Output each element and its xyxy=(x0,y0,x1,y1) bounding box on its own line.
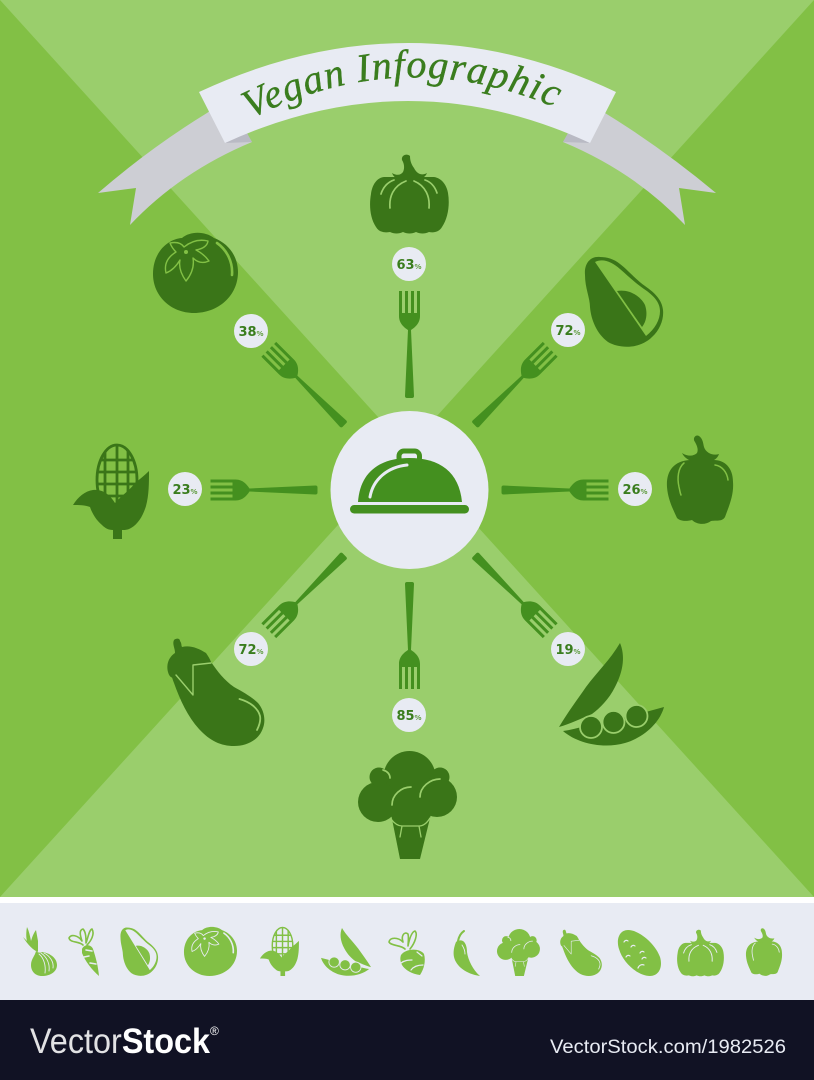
fork: bottom xyxy=(399,582,420,689)
icon: bell pepper xyxy=(667,435,733,524)
icon: pumpkin xyxy=(370,155,449,234)
cloche tray xyxy=(350,505,469,514)
small icon: carrot xyxy=(69,929,99,976)
footer bar xyxy=(0,1000,814,1080)
badge: 38% xyxy=(234,314,268,348)
badge: 23%: 23% xyxy=(172,483,198,498)
cloche handle xyxy=(399,451,420,463)
badge: 72% top right xyxy=(551,313,585,347)
badge: 26% xyxy=(618,472,652,506)
ribbon banner with title xyxy=(98,43,716,225)
small icon: chili xyxy=(454,931,480,976)
background: top light triangle xyxy=(0,0,814,449)
footer image id: VectorStock.com/1982526 xyxy=(550,1037,786,1058)
badge: 38%: 38% xyxy=(238,325,264,340)
badge: 19%: 19% xyxy=(555,643,581,658)
icon: peas xyxy=(559,643,664,746)
white divider strip xyxy=(0,897,814,903)
ribbon left fold xyxy=(225,133,252,143)
small icon: peas xyxy=(321,928,371,976)
fork: left xyxy=(210,480,318,500)
icon: eggplant xyxy=(167,639,264,746)
badge: 63% xyxy=(392,247,426,281)
fork: top left xyxy=(261,342,352,432)
background: bottom light triangle xyxy=(0,449,814,897)
badge: 72% bottom left xyxy=(234,632,268,666)
icon: avocado xyxy=(585,257,663,347)
small icon: pepper xyxy=(746,928,782,976)
fork: bottom left xyxy=(261,548,352,638)
cloche dome xyxy=(358,458,462,502)
small icon: tomato xyxy=(184,927,237,976)
badge: 26%: 26% xyxy=(622,483,648,498)
forks radiating from the plate xyxy=(210,291,608,689)
ribbon right fold xyxy=(563,133,590,143)
small icon: potato xyxy=(618,930,661,976)
small icon: corn xyxy=(260,925,299,976)
badge: 72% top right: 72% xyxy=(555,324,581,339)
small icon: onion xyxy=(23,927,57,976)
icon: broccoli xyxy=(358,751,457,859)
badge: 85% xyxy=(392,698,426,732)
plate circle xyxy=(330,411,488,569)
small icon: eggplant xyxy=(560,930,602,976)
panel: vegetable icon strip xyxy=(0,903,814,1000)
badge: 19% xyxy=(551,632,585,666)
fork: top right xyxy=(467,342,558,432)
small icon: broccoli xyxy=(497,929,540,976)
icon: tomato xyxy=(153,233,238,313)
badge: 23% xyxy=(168,472,202,506)
badge: 85%: 85% xyxy=(396,709,422,724)
fork: bottom right xyxy=(467,548,558,638)
cloche highlight xyxy=(370,465,407,497)
badge: 72% bottom left: 72% xyxy=(238,643,264,658)
title: Vegan Infographic xyxy=(240,49,562,116)
small icon: beet xyxy=(389,931,425,975)
footer logo: registered mark: ® xyxy=(210,1024,219,1038)
small icon: avocado xyxy=(120,928,158,976)
ribbon right tail xyxy=(563,100,716,225)
ribbon main band xyxy=(199,43,616,143)
small icon: pumpkin xyxy=(677,930,724,976)
badge: 63%: 63% xyxy=(396,258,422,273)
icon: corn xyxy=(73,440,149,539)
footer logo: VectorStock: VectorStock xyxy=(30,1022,210,1061)
ribbon left tail xyxy=(98,100,252,225)
central plate with cloche xyxy=(330,411,488,569)
fork: right xyxy=(502,480,608,500)
fork: top xyxy=(399,291,420,398)
